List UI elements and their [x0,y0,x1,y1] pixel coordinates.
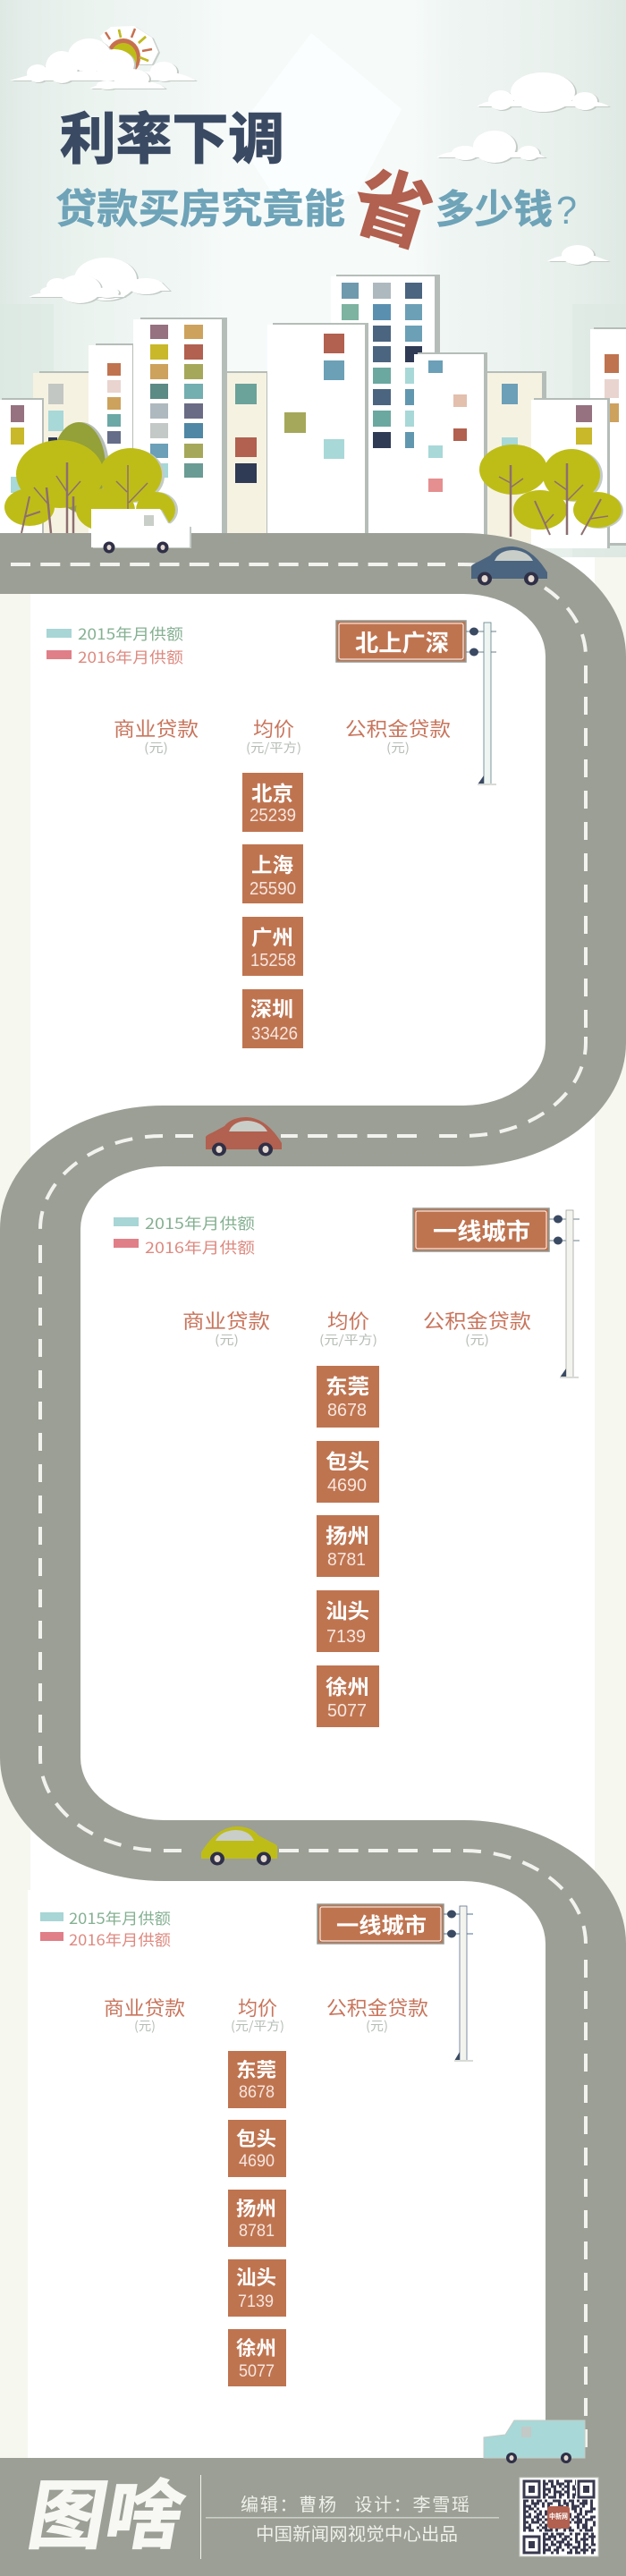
cloud: small front [89,69,165,89]
white building 8 [531,398,610,548]
city: 扬州: 8781 [327,1550,366,1570]
cloud: top right [477,72,609,112]
city: 广州: 15258 [250,951,296,970]
logo: 图啥: 图啥 [21,2456,194,2564]
column headers: 商业贷款 [104,1993,185,2021]
column headers: 均价 [238,1993,277,2021]
beige building middle [224,371,268,543]
cloud: top left [10,38,196,83]
city: 包头 [228,2120,286,2177]
legend: 2016年月供额 [78,645,183,667]
city: 扬州: 扬州 [326,1519,369,1549]
subtitle: 多少钱: 多少钱 [436,177,553,234]
city: 汕头 [317,1590,379,1652]
white van [91,509,191,553]
footer credits: 编辑：曹杨 设计：李雪瑶 [241,2490,470,2516]
city: 徐州 [317,1665,379,1727]
city: 北京: 北京 [251,776,293,807]
city: 包头 [317,1441,379,1503]
road sign: 一线城市 [433,1214,530,1247]
beige building right [484,371,546,543]
footer divider [200,2475,201,2559]
city: 徐州: 徐州 [326,1670,369,1700]
legend: 2015年月供额 [145,1211,255,1233]
trees: left group [4,422,178,533]
white building 2 [89,343,135,542]
cloud: lower right [547,245,609,265]
right-most building [590,327,626,546]
yellow car [201,1826,277,1866]
beige building left [33,371,95,543]
white building 3 [133,318,227,543]
legend [47,622,183,667]
subtitle accent: 省: 省 [340,138,449,269]
footer rule [206,2517,499,2519]
subtitle: question mark: ? [556,189,577,233]
sign pole [549,1210,579,1378]
road sign [336,621,466,662]
city: 东莞: 8678 [239,2083,275,2102]
city: 徐州: 徐州 [236,2333,276,2361]
column headers: (元/平方) [246,739,301,757]
sky background [0,0,626,557]
panel: 北上广深 [47,621,496,1048]
column headers: 公积金贷款 [345,714,451,742]
city: 汕头 [228,2259,286,2317]
city: 深圳: 33426 [251,1024,298,1044]
city: 汕头: 汕头 [326,1594,369,1624]
city: 深圳: 深圳 [250,992,293,1022]
legend [40,1906,171,1950]
QR code: 中新网 [549,2512,568,2521]
sign pole [444,1906,473,2062]
QR code [520,2478,598,2556]
city: 上海 [242,844,303,903]
cloud: lower left back [72,258,170,301]
buildings [0,275,626,548]
column headers: (元) [215,1331,239,1349]
city: 东莞 [317,1366,379,1428]
legend: 2016年月供额 [69,1928,171,1950]
title: 利率下调: 利率下调 [60,94,284,174]
subtitle: 贷款买房究竟能: 贷款买房究竟能 [55,176,345,234]
red car [206,1117,282,1156]
city: 广州: 广州 [251,920,293,951]
cloud: lower left front [29,275,125,303]
city: 包头: 4690 [239,2152,275,2171]
road sign [317,1904,444,1944]
city: 东莞: 东莞 [326,1369,369,1400]
legend [114,1211,255,1258]
city: 上海: 上海 [251,848,293,878]
city: 汕头: 汕头 [236,2262,276,2291]
column headers: 商业贷款 [182,1306,270,1335]
city: 东莞: 东莞 [236,2055,276,2083]
column headers: (元/平方) [319,1331,377,1349]
city: 扬州: 8781 [239,2222,275,2241]
column headers [104,1993,428,2035]
legend: 2015年月供额 [78,622,183,644]
column headers: 公积金贷款 [326,1993,428,2021]
road centre dashes [11,564,586,2449]
column headers: (元) [134,2017,156,2035]
city: 徐州: 5077 [239,2362,275,2381]
road sign: 一线城市 [336,1908,427,1939]
teal van [484,2420,585,2463]
city: 东莞: 8678 [327,1401,367,1420]
city: 东莞 [228,2051,286,2108]
column headers: (元) [465,1331,489,1349]
road sign [413,1208,549,1251]
trees: right group [479,445,623,537]
city: 扬州 [317,1515,379,1577]
column headers: 商业贷款 [114,714,199,742]
city: 扬州: 扬州 [236,2193,276,2222]
city: 徐州 [228,2329,286,2386]
winding road [0,533,626,2458]
road sign: 北上广深 [355,625,449,658]
city: 包头: 包头 [326,1445,369,1475]
city: 徐州: 5077 [327,1701,367,1721]
column headers: (元) [386,739,410,757]
city: 包头: 包头 [236,2123,276,2152]
city: 汕头: 7139 [238,2292,274,2311]
footer bar [0,2458,626,2576]
column headers: (元/平方) [231,2017,284,2035]
city: 扬州 [228,2190,286,2247]
city: 上海: 25590 [250,879,296,899]
white building 5 [267,323,368,544]
city: 广州 [242,917,303,976]
sign pole [466,623,496,785]
city: 北京: 25239 [250,806,296,826]
column headers: (元) [366,2017,388,2035]
blue car [471,547,547,585]
back tall building [331,275,440,545]
column headers: 公积金贷款 [423,1306,531,1335]
footer publisher: 中国新闻网视觉中心出品 [256,2520,458,2546]
column headers: (元) [144,739,168,757]
cloud: middle right [436,131,546,163]
column headers [182,1306,531,1349]
city: 包头: 4690 [327,1476,367,1496]
icon: sun [100,26,158,76]
white building 6 [414,352,487,544]
city: 深圳 [242,989,303,1048]
white building far left [0,398,44,547]
column headers [114,714,451,757]
panel: 一线城市 first [114,1208,579,1727]
city: 北京 [242,773,303,832]
column headers: 均价 [253,714,294,742]
column headers: 均价 [327,1306,369,1335]
panel: 一线城市 second [40,1904,473,2386]
legend: 2015年月供额 [69,1906,171,1928]
city: 汕头: 7139 [326,1627,366,1647]
legend: 2016年月供额 [145,1235,255,1258]
